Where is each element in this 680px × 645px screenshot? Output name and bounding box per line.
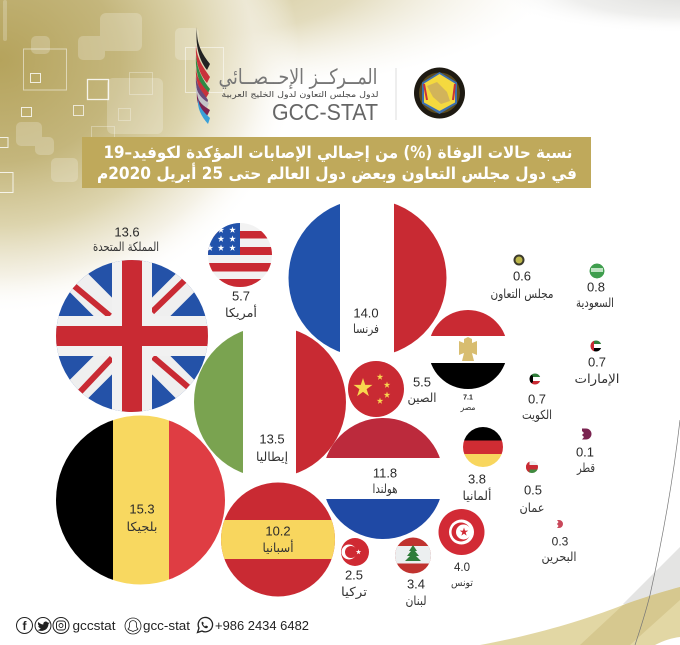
bubble: Spain	[221, 482, 335, 597]
bubble: France: فرنسا	[353, 321, 379, 337]
bubble: Egypt	[428, 310, 508, 412]
logo text: Arabic name: المــركــز الإحــصــائي	[218, 65, 378, 89]
bubble: Lebanon	[395, 537, 431, 608]
bubble: Turkey: 2.5	[345, 568, 363, 582]
icon: instagram	[53, 618, 69, 634]
bubble: UAE	[574, 340, 620, 387]
icon: GCC emblem	[414, 68, 465, 118]
bubble: Tunisia	[438, 509, 484, 589]
flag: China	[348, 361, 404, 417]
bubble: Germany: 3.8	[468, 472, 486, 486]
flag: Bahrain	[557, 520, 563, 528]
bubble: Netherlands: هولندا	[372, 481, 398, 497]
title line 1: نسبة حالات الوفاة (%) من إجمالي الإصابات المؤكدة لكوفيد–19	[104, 143, 572, 163]
title banner	[82, 137, 591, 188]
bubble: Germany: ألمانيا	[462, 487, 492, 503]
bubble: Italy: 13.5	[259, 432, 285, 446]
bubble: Lebanon: 3.4	[407, 576, 425, 592]
flag: Qatar	[582, 428, 592, 440]
logo: GCC-STAT	[196, 27, 378, 125]
bubble: China	[348, 361, 436, 417]
flag: Germany	[463, 427, 503, 468]
bubble: Egypt: 7.1	[463, 394, 473, 402]
bubble: Saudi Arabia: السعودية	[576, 295, 614, 311]
flag: Egypt	[428, 310, 508, 390]
flag: France	[288, 199, 448, 357]
title line 2: في دول مجلس التعاون وبعض دول العالم حتى 25 أبريل 2020م	[97, 163, 577, 184]
bubble: United Kingdom: 13.6	[114, 224, 140, 240]
bubble: Bahrain: 0.3	[552, 534, 569, 548]
bubble: USA: أمريكا	[225, 304, 257, 321]
bubble: Germany	[462, 427, 503, 503]
bubble: GCC	[490, 254, 554, 302]
logo text: Arabic subtitle: لدول مجلس التعاون لدول الخليج العربية	[222, 90, 378, 99]
bubble: Oman	[520, 461, 544, 515]
bubble: Kuwait	[522, 373, 552, 423]
bubble: China: الصين	[408, 390, 436, 406]
bubble: Netherlands: 11.8	[373, 466, 397, 480]
icon: facebook	[16, 618, 32, 634]
bubble: Oman: 0.5	[524, 482, 542, 498]
flag: Belgium	[56, 415, 226, 585]
flag: Italy	[194, 326, 346, 478]
bubble: United Kingdom	[56, 224, 208, 412]
flag: Saudi Arabia	[590, 264, 604, 278]
bubble: Qatar: 0.1	[576, 444, 594, 460]
bubble: Saudi Arabia	[576, 264, 614, 311]
flag: Spain	[221, 482, 335, 597]
bubble: Qatar	[576, 428, 595, 476]
bubble: USA: 5.7	[232, 288, 250, 304]
bubble: Italy	[194, 326, 346, 478]
bubble: Italy: إيطاليا	[256, 449, 288, 464]
bubble: Belgium	[56, 415, 226, 585]
bubble: Bahrain	[542, 520, 576, 565]
icon: ribbon	[196, 27, 210, 124]
bubble: UAE: الإمارات	[574, 371, 620, 387]
bubble: Spain: أسبانيا	[262, 539, 294, 555]
flag: Netherlands	[322, 418, 444, 540]
flag: USA	[207, 223, 272, 287]
phone number: +986 2434 6482	[215, 618, 309, 633]
bubble: Spain: 10.2	[265, 524, 291, 538]
bubble: Tunisia: تونس	[451, 578, 473, 589]
icon: twitter	[35, 618, 51, 634]
bubble: Kuwait: الكويت	[522, 407, 552, 423]
bubble: Bahrain: البحرين	[542, 549, 576, 565]
bubble: Belgium: بلجيكا	[126, 519, 158, 534]
bubble: Saudi Arabia: 0.8	[587, 280, 605, 294]
handle: gcc-stat: gcc-stat	[143, 618, 190, 633]
bubble: Qatar: قطر	[576, 460, 595, 476]
bubble: GCC: 0.6	[513, 268, 531, 284]
handle: gccstat: gccstat	[72, 618, 116, 633]
bubble: Turkey: تركيا	[341, 584, 368, 600]
footer: social media	[16, 617, 309, 634]
icon: facebook: f	[22, 619, 28, 633]
flag: Tunisia	[438, 509, 484, 555]
bubble: Egypt: مصر	[460, 403, 476, 412]
bubble: France: 14.0	[353, 306, 379, 320]
flag: UK	[56, 260, 208, 412]
flag: Turkey	[341, 538, 369, 566]
flag: Oman	[526, 461, 538, 474]
bubble: GCC: مجلس التعاون	[490, 286, 554, 302]
bubble: USA	[207, 223, 272, 321]
bubble: Belgium: 15.3	[129, 502, 155, 516]
bubble: Kuwait: 0.7	[528, 392, 546, 406]
bubble: United Kingdom: المملكة المتحدة	[93, 239, 159, 254]
bubble: Turkey	[341, 538, 369, 600]
icon: GCC dot	[514, 254, 524, 266]
flag: Kuwait	[530, 374, 540, 384]
icon: snapchat	[125, 618, 141, 634]
bubble: France	[288, 199, 448, 357]
bubble: Oman: عمان	[520, 500, 544, 515]
logo text: GCC-STAT: GCC-STAT	[272, 99, 378, 125]
bubble: Tunisia: 4.0	[454, 562, 470, 574]
flag: Lebanon	[395, 537, 431, 574]
flag: UAE	[590, 340, 602, 352]
bubble: Lebanon: لبنان	[406, 593, 426, 608]
bubble: UAE: 0.7	[588, 354, 606, 370]
icon: whatsapp	[198, 617, 213, 632]
bubble: Netherlands	[322, 418, 444, 540]
bubble: China: 5.5	[413, 374, 431, 390]
